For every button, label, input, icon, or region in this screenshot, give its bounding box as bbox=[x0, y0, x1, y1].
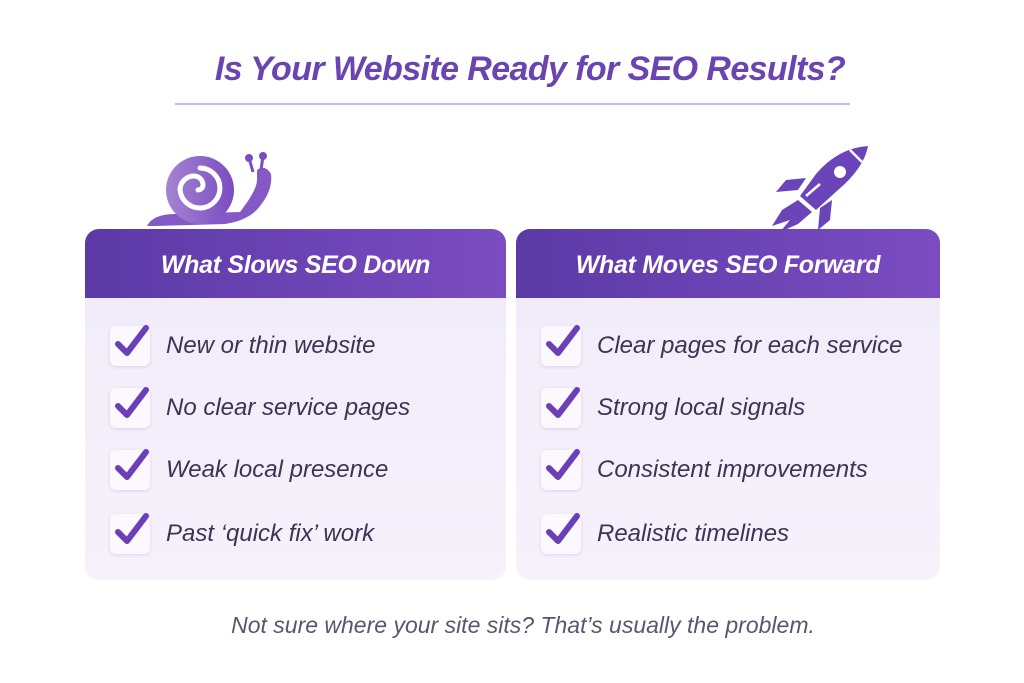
item 3 bbox=[109, 449, 388, 492]
item 1: Clear pages for each service bbox=[597, 332, 902, 359]
heading: moves bbox=[516, 229, 940, 298]
footer text: Not sure where your site sits? That’s usually the problem. bbox=[231, 612, 815, 638]
panel: what moves SEO forward bbox=[516, 229, 940, 580]
item 2 bbox=[540, 387, 805, 430]
item 2: No clear service pages bbox=[166, 394, 410, 421]
item 1 bbox=[109, 325, 375, 368]
icon: snail bbox=[147, 152, 272, 226]
item 4: Past ‘quick fix’ work bbox=[166, 520, 374, 547]
item 3 bbox=[540, 449, 868, 492]
item 2: Strong local signals bbox=[597, 394, 805, 421]
item 1: New or thin website bbox=[166, 332, 375, 359]
item 4 bbox=[540, 513, 789, 556]
heading: slows bbox=[85, 229, 506, 298]
item 3: Consistent improvements bbox=[597, 456, 868, 483]
heading: slows: What Slows SEO Down bbox=[161, 251, 430, 279]
panel: what slows SEO down bbox=[85, 229, 506, 580]
item 3: Weak local presence bbox=[166, 456, 388, 483]
item 4: Realistic timelines bbox=[597, 520, 789, 547]
item 4 bbox=[109, 513, 375, 556]
heading: moves: What Moves SEO Forward bbox=[576, 251, 880, 279]
icon: rocket bbox=[772, 146, 868, 229]
title: Is Your Website Ready for SEO Results? bbox=[215, 50, 845, 88]
item 1 bbox=[540, 325, 902, 368]
item 2 bbox=[109, 387, 410, 430]
